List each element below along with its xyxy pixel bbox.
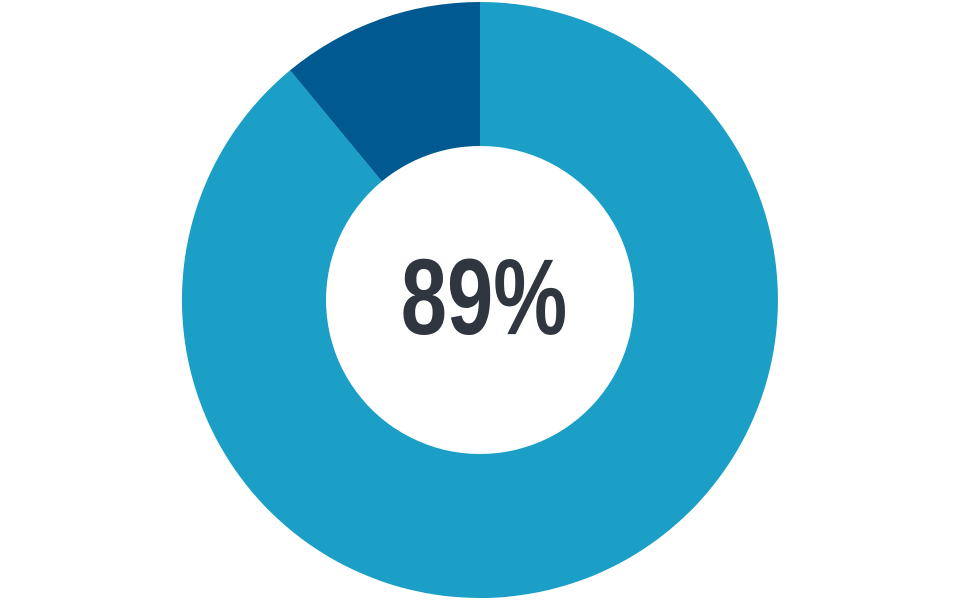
segment: 11% dark blue (290, 2, 480, 181)
center label: 89%: 89% (401, 238, 567, 358)
segment: 89% light blue (182, 2, 778, 598)
